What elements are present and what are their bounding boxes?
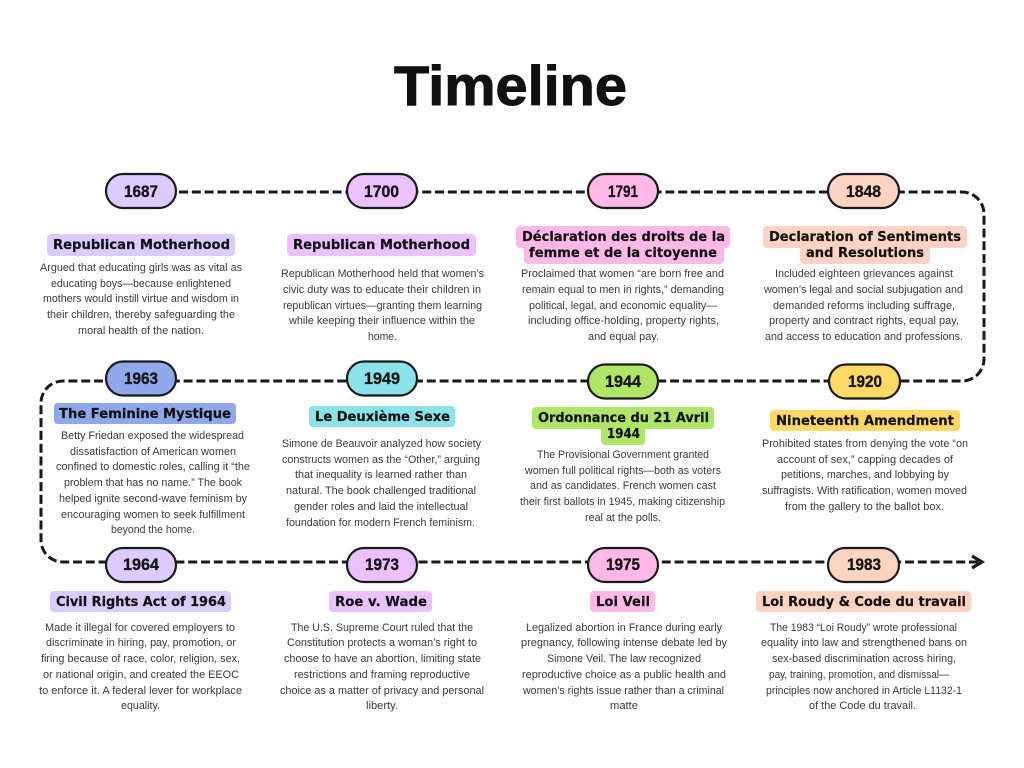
year pill: 1848 [846, 183, 881, 201]
description: Proclaimed that women “are born free and [521, 268, 724, 280]
description: firing because of race, color, religion, sex, [41, 653, 240, 665]
description: petitions, marches, and lobbying by [781, 469, 949, 481]
description: suffragists. With ratification, women moved [762, 485, 967, 497]
year pill: 1975 [606, 556, 640, 574]
event: 1975 Loi Veil [521, 548, 727, 712]
description: The Provisional Government granted [537, 449, 709, 461]
year pill: 1983 [847, 556, 881, 574]
description: restrictions and framing reproductive [294, 669, 470, 681]
description: their children, thereby safeguarding the [47, 309, 235, 321]
description: Betty Friedan exposed the widespread [61, 430, 244, 442]
description: demanded reforms including suffrage, [773, 300, 955, 312]
description: home. [368, 331, 397, 343]
year pill [828, 548, 899, 582]
year pill [347, 174, 417, 208]
description [280, 622, 484, 712]
description: gender roles and laid the intellectual [294, 501, 468, 513]
year pill [106, 362, 176, 396]
year pill: 1944 [605, 373, 642, 391]
year pill [588, 174, 658, 208]
description: Simone Veil. The law recognized [547, 653, 701, 665]
event: 1848 Declaration of Sentiments [763, 174, 967, 343]
description: dissatisfaction of American women [70, 446, 236, 458]
event: 1949 Le Deuxième Sexe [282, 362, 481, 529]
heading: femme et de la citoyenne [529, 246, 717, 261]
heading [770, 410, 960, 431]
description: confined to domestic roles, calling it “the [56, 461, 250, 473]
year pill: 1973 [365, 556, 399, 574]
heading [329, 591, 432, 612]
description: or national origin, and created the EEOC [43, 669, 239, 681]
description: choice as a matter of privacy and personal [280, 685, 484, 697]
year pill [588, 548, 658, 582]
year pill: 1791 [608, 183, 638, 201]
description: problem that has no name.” The book [64, 477, 242, 489]
description: principles now anchored in Article L1132-1 [766, 685, 962, 697]
description [282, 438, 481, 529]
description: political, legal, and economic equality— [529, 300, 717, 312]
heading: Nineteenth Amendment [776, 414, 954, 429]
heading: Republican Motherhood [53, 238, 230, 253]
description: and access to education and professions. [765, 331, 963, 343]
heading: 1944 [607, 427, 640, 442]
description: while keeping their influence within the [288, 315, 475, 327]
heading [54, 403, 236, 424]
description: Constitution protects a woman’s right to [287, 637, 477, 649]
description: encouraging women to seek fulfillment [61, 509, 245, 521]
description: Legalized abortion in France during early [526, 622, 722, 634]
heading [287, 234, 476, 256]
description [763, 268, 963, 343]
description: sex-based discrimination across hiring, [772, 653, 956, 665]
event: 1791 Déclaration [516, 174, 730, 343]
description: Included eighteen grievances against [775, 268, 953, 280]
description: equality. [121, 700, 160, 712]
event: 1687 Republican Motherhood [40, 174, 242, 337]
year pill: 1700 [364, 183, 399, 201]
year pill [588, 364, 658, 398]
description [520, 449, 725, 524]
event: 1700 Republican Motherhood [281, 174, 484, 343]
year pill [347, 548, 417, 582]
description: pay, training, promotion, and dismissal— [769, 669, 949, 681]
description: real at the polls. [585, 512, 661, 524]
description [56, 430, 250, 536]
description: foundation for modern French feminism. [286, 517, 475, 529]
heading [309, 406, 455, 427]
heading [756, 591, 971, 612]
description [762, 438, 968, 513]
heading: Civil Rights Act of 1964 [56, 595, 226, 610]
year pill: 1687 [124, 183, 158, 201]
description: civic duty was to educate their children in [283, 284, 481, 296]
description: Republican Motherhood held that women’s [281, 268, 484, 280]
description [40, 262, 242, 337]
description: reproductive choice as a public health and [522, 669, 726, 681]
heading: Republican Motherhood [293, 238, 470, 253]
description: remain equal to men in rights,” demanding [522, 284, 724, 296]
description: equality into law and strengthened bans on [761, 637, 967, 649]
description: and as candidates. French women cast [530, 480, 716, 492]
description: The U.S. Supreme Court ruled that the [291, 622, 473, 634]
arrow head [972, 556, 982, 568]
description: Prohibited states from denying the vote “on [762, 438, 968, 450]
description: constructs women as the “Other,” arguing [282, 454, 480, 466]
description [761, 622, 967, 712]
event: 1920 Nineteenth Amendment [762, 364, 968, 513]
year pill: 1949 [364, 370, 400, 388]
heading: The Feminine Mystique [59, 407, 231, 422]
title: Timeline [394, 54, 627, 117]
description [521, 622, 727, 712]
description: choose to have an abortion, limiting state [284, 653, 481, 665]
heading [516, 226, 730, 264]
heading [763, 226, 967, 264]
description [521, 268, 724, 343]
description: their first ballots in 1945, making citizenship [520, 496, 725, 508]
description: women full political rights—both as voters [524, 465, 721, 477]
heading: Ordonnance du 21 Avril [538, 411, 709, 426]
heading [590, 591, 655, 612]
description: and equal pay. [588, 331, 659, 343]
description: helped ignite second-wave feminism by [59, 493, 247, 505]
description: Argued that educating girls was as vital as [40, 262, 242, 274]
year pill [347, 362, 417, 396]
event: 1944 Ordonnance du 21 Avril 1944 [520, 364, 725, 524]
description: of the Code du travail. [809, 700, 916, 712]
year pill [106, 174, 176, 208]
description: that inequality is learned rather than [295, 469, 467, 481]
event: 1973 Roe v. Wade [280, 548, 484, 712]
event: 1963 The Feminine Mystique [54, 362, 250, 536]
description: natural. The book challenged traditional [286, 485, 476, 497]
description: republican virtues—granting them learning [283, 300, 482, 312]
description: The 1983 “Loi Roudy” wrote professional [770, 622, 957, 634]
description [281, 268, 484, 343]
description [39, 622, 242, 712]
description: to enforce it. A federal lever for workplace [39, 685, 242, 697]
heading [532, 407, 714, 445]
description: including office-holding, property rights, [528, 315, 719, 327]
event: 1964 Civil Rights Act of 1964 [39, 548, 242, 712]
description: women’s rights issue rather than a criminal [522, 685, 724, 697]
year pill: 1963 [124, 370, 158, 388]
description: liberty. [366, 700, 398, 712]
heading: Roe v. Wade [335, 595, 427, 610]
description: account of sex,” capping decades of [777, 454, 954, 466]
description: matte [610, 700, 638, 712]
event: 1983 Loi Roudy & Code du travail [756, 548, 971, 712]
heading: and Resolutions [806, 246, 924, 261]
description: Simone de Beauvoir analyzed how society [282, 438, 481, 450]
year pill: 1964 [123, 556, 160, 574]
heading: Déclaration des droits de la [522, 230, 725, 245]
timeline dashed connector [41, 192, 984, 562]
year pill: 1920 [848, 373, 882, 391]
heading: Loi Veil [596, 595, 650, 610]
heading: Declaration of Sentiments [769, 230, 961, 245]
description: educating boys—because enlightened [51, 278, 231, 290]
heading: Le Deuxième Sexe [315, 410, 450, 425]
description: Made it illegal for covered employers to [45, 622, 235, 634]
description: property and contract rights, equal pay, [769, 315, 959, 327]
description: from the gallery to the ballot box. [785, 501, 944, 513]
description: moral health of the nation. [78, 325, 204, 337]
heading [50, 591, 231, 612]
description: pregnancy, following intense debate led by [521, 637, 727, 649]
description: women’s legal and social subjugation and [763, 284, 963, 296]
year pill [106, 548, 176, 582]
description: beyond the home. [111, 524, 195, 536]
heading [47, 234, 235, 256]
year pill [829, 364, 900, 398]
heading: Loi Roudy & Code du travail [762, 595, 966, 610]
description: discriminate in hiring, pay, promotion, or [46, 637, 236, 649]
description: mothers would instill virtue and wisdom in [43, 293, 239, 305]
year pill [828, 174, 899, 208]
